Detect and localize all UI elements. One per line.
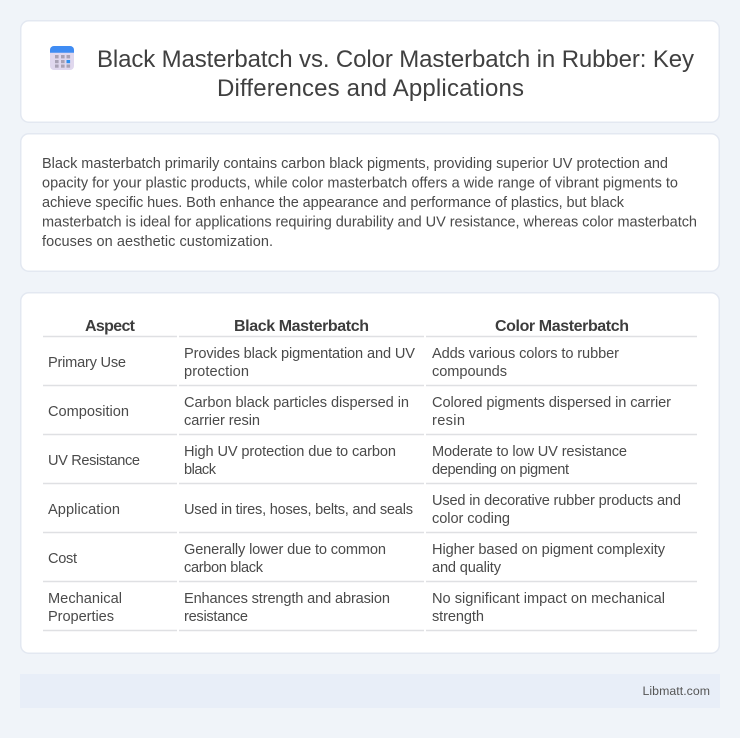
- table row: UV Resistance: Moderate to low UV resistance: [432, 444, 627, 460]
- footer: Libmatt.com: [642, 684, 710, 698]
- text block: introduction paragraph: [42, 156, 697, 250]
- title: [97, 46, 694, 102]
- title: Differences and Applications: [217, 75, 524, 102]
- panel: title card: [21, 21, 719, 122]
- table row: Mechanical Properties: resistance: [184, 609, 248, 625]
- table row: Primary Use: protection: [184, 364, 249, 380]
- table row: Primary Use: Adds various colors to rubber: [432, 346, 619, 362]
- table header: Aspect: [85, 318, 136, 335]
- table row: Cost: carbon black: [184, 560, 264, 576]
- table row: Mechanical Properties: Enhances strength and abrasion: [184, 591, 390, 607]
- table row: Application: Application: [48, 502, 120, 518]
- text block: introduction paragraph: opacity for your plastic products, while color masterbatch offers a wide range of vibrant pigments to: [42, 176, 678, 192]
- table header: Color Masterbatch: [495, 318, 629, 335]
- text block: introduction paragraph: focuses on aesthetic customization.: [42, 234, 273, 250]
- table row: Mechanical Properties: strength: [432, 609, 484, 625]
- icon: calendar: [50, 46, 74, 70]
- table row: UV Resistance: [43, 444, 697, 484]
- panel: introduction: [21, 134, 719, 271]
- panel: comparison table: [21, 293, 719, 653]
- table row: Primary Use: [43, 346, 697, 386]
- table row: Composition: resin: [432, 413, 465, 429]
- table row: Primary Use: Provides black pigmentation and UV: [184, 346, 415, 362]
- table row: Cost: Higher based on pigment complexity: [432, 542, 666, 558]
- table row: Mechanical Properties: No significant impact on mechanical: [432, 591, 665, 607]
- table row: Composition: Colored pigments dispersed in carrier: [432, 395, 671, 411]
- title: Black Masterbatch vs. Color Masterbatch in Rubber: Key: [97, 46, 694, 73]
- table row: Mechanical Properties: Mechanical: [48, 591, 122, 607]
- table row: Mechanical Properties: [43, 591, 697, 630]
- table row: Application: Used in decorative rubber products and: [432, 493, 681, 509]
- footer: [20, 674, 720, 708]
- table row: Composition: [43, 395, 697, 434]
- table row: Application: Used in tires, hoses, belts, and seals: [184, 502, 413, 518]
- table header: [43, 318, 697, 336]
- table header: Black Masterbatch: [234, 318, 369, 335]
- table row: Cost: and quality: [432, 560, 502, 576]
- table row: Cost: Cost: [48, 551, 77, 567]
- table row: Primary Use: Primary Use: [48, 355, 126, 371]
- text block: introduction paragraph: achieve specific hues. Both enhance the appearance and performance of plastics, but black: [42, 195, 625, 211]
- table row: Composition: Composition: [48, 404, 129, 420]
- table row: UV Resistance: depending on pigment: [432, 462, 569, 478]
- text block: introduction paragraph: Black masterbatch primarily contains carbon black pigments, providing superior UV protection and: [42, 156, 668, 172]
- table row: Application: [43, 493, 697, 532]
- table row: Composition: carrier resin: [184, 413, 260, 429]
- table row: Primary Use: compounds: [432, 364, 507, 380]
- table row: UV Resistance: black: [184, 462, 217, 478]
- text block: introduction paragraph: masterbatch is ideal for applications requiring durability and UV resistance, whereas color masterbatch: [42, 214, 697, 230]
- table row: Cost: [43, 542, 697, 582]
- table row: Cost: Generally lower due to common: [184, 542, 386, 558]
- table row: UV Resistance: UV Resistance: [48, 453, 140, 469]
- table row: Mechanical Properties: Properties: [48, 609, 114, 625]
- table row: Application: color coding: [432, 511, 510, 527]
- table row: UV Resistance: High UV protection due to carbon: [184, 444, 396, 460]
- table row: Composition: Carbon black particles dispersed in: [184, 395, 409, 411]
